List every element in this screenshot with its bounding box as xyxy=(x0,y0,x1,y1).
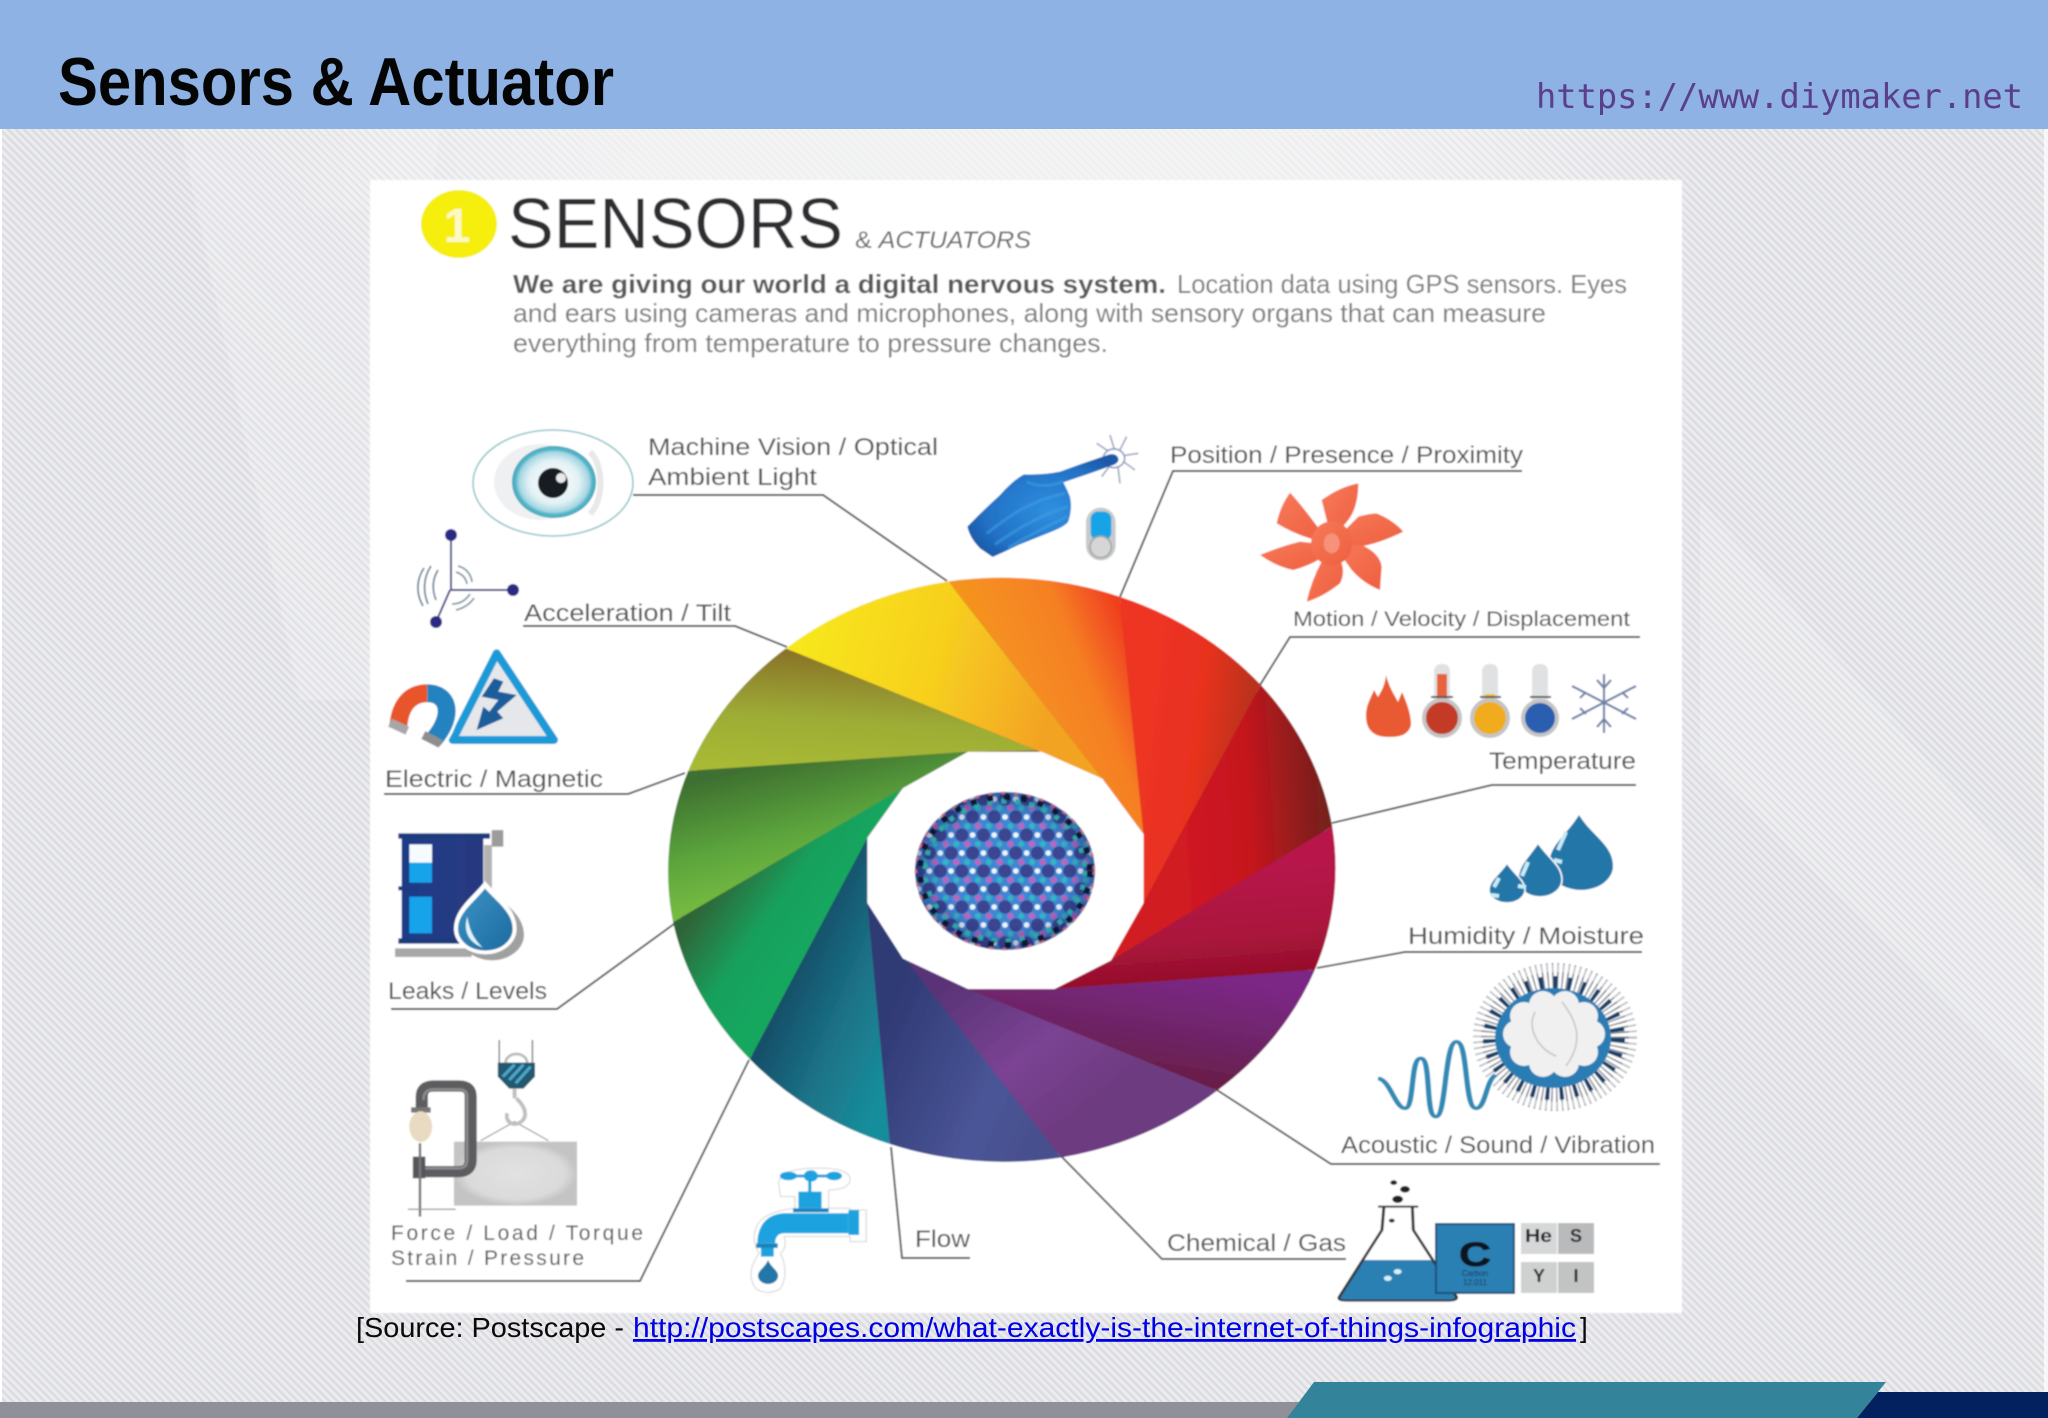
intro paragraph: Location data using GPS sensors. Eyes xyxy=(1177,269,1627,299)
panel: sensors infographic xyxy=(370,180,1682,1313)
intro paragraph: everything from temperature to pressure changes. xyxy=(513,328,1108,358)
icon: flask and periodic tiles: 12.011 xyxy=(1463,1278,1487,1287)
website url: https://www.diymaker.net xyxy=(1536,77,2023,116)
sensor labels: Chemical / Gas xyxy=(1167,1230,1346,1257)
icon: flask and periodic tiles: S xyxy=(1570,1226,1582,1246)
icon: flask and periodic tiles: Carbon xyxy=(1462,1269,1488,1278)
icon: flask and periodic tiles: Y xyxy=(1533,1266,1545,1286)
icon: acceleration axes xyxy=(418,529,519,628)
icon: tank and drop xyxy=(395,830,524,960)
sensor labels: Humidity / Moisture xyxy=(1408,923,1644,950)
colour wheel xyxy=(668,578,1336,1162)
icon: flask and periodic tiles: I xyxy=(1573,1266,1579,1286)
source citation: ] xyxy=(1580,1312,1588,1343)
intro paragraph: and ears using cameras and microphones, along with sensory organs that can measure xyxy=(513,298,1546,328)
sensor labels: Flow xyxy=(915,1226,971,1253)
header band xyxy=(0,0,2048,129)
leader lines xyxy=(384,471,1660,1281)
sensor labels: Temperature xyxy=(1489,748,1636,775)
icon: flask and periodic tiles: He xyxy=(1525,1226,1552,1246)
sensor labels xyxy=(385,434,1655,1270)
source citation: [Source: Postscape - xyxy=(356,1312,624,1343)
sensor labels: Machine Vision / Optical xyxy=(648,434,938,461)
icon: eye xyxy=(473,430,633,536)
heading: actuators: & ACTUATORS xyxy=(855,227,1031,254)
icon: flask and periodic tiles xyxy=(1339,1180,1594,1301)
icon: flask and periodic tiles: C xyxy=(1459,1236,1491,1274)
icon: sound burst and wave xyxy=(1378,968,1633,1117)
intro paragraph: We are giving our world a digital nervous system. xyxy=(513,269,1166,299)
sensor labels: Force / Load / Torque xyxy=(391,1222,643,1245)
sensor labels: Leaks / Levels xyxy=(388,978,547,1005)
intro paragraph xyxy=(513,269,1627,358)
title: Sensors & Actuator xyxy=(58,44,614,120)
badge: number 1: 1 xyxy=(444,200,470,253)
sensor labels: Position / Presence / Proximity xyxy=(1170,442,1523,469)
icon: faucet xyxy=(751,1168,866,1292)
badge: number 1 xyxy=(421,190,497,258)
icon: humidity drops xyxy=(1489,815,1613,903)
sensor labels: Electric / Magnetic xyxy=(385,766,603,793)
sensor labels: Acceleration / Tilt xyxy=(524,600,731,627)
icon: flame, thermometers, snowflake xyxy=(1366,664,1636,737)
icon: fan xyxy=(1260,483,1403,602)
footer bars xyxy=(0,1382,2048,1418)
sensor labels: Motion / Velocity / Displacement xyxy=(1293,608,1630,631)
sensor labels: Acoustic / Sound / Vibration xyxy=(1341,1132,1655,1159)
source citation: http://postscapes.com/what-exactly-is-the-internet-of-things-infographic xyxy=(633,1312,1576,1343)
wheel centre: dotted sphere xyxy=(915,792,1095,950)
heading: sensors: SENSORS xyxy=(508,185,843,264)
icon: pointing hand with switch xyxy=(967,435,1138,560)
icon: clamp and hanging load xyxy=(408,1040,577,1217)
icon: magnet and electric triangle xyxy=(390,653,554,744)
sensor labels: Strain / Pressure xyxy=(391,1247,584,1270)
sensor labels: Ambient Light xyxy=(648,464,817,491)
